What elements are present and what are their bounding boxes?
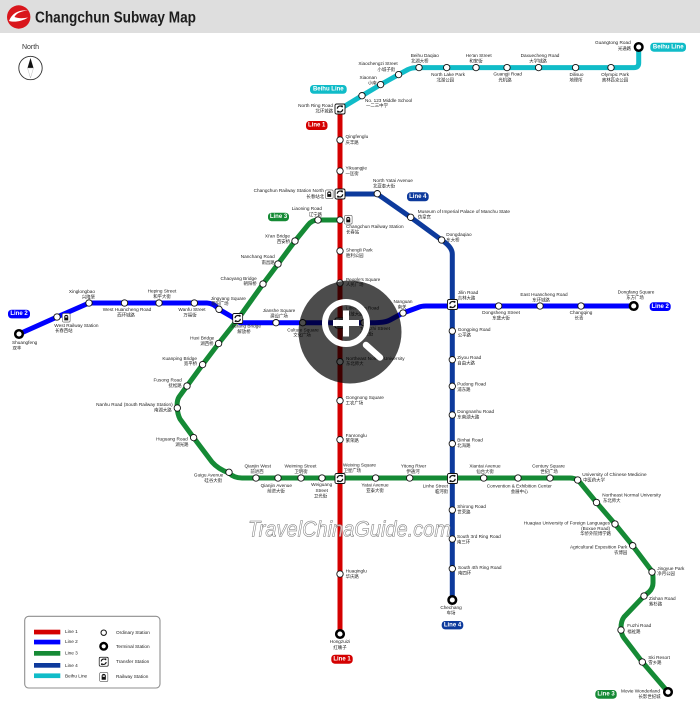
station: Northeast Normal University (line 3) — [593, 492, 662, 506]
station: Chaoyang Bridge: 朝阳桥 — [244, 280, 257, 287]
station: Ski Resort: Ski Resort — [648, 655, 671, 660]
station: Ziyou Road — [449, 355, 482, 366]
station: Dongsheng Street: Dongsheng Street — [482, 310, 521, 315]
station: Shuangfeng: Shuangfeng — [12, 340, 38, 345]
station: South 3rd Ring Road — [449, 534, 501, 546]
line 4 route — [340, 194, 452, 600]
station: Jiefang Bridge — [231, 314, 261, 335]
stations of beihu line — [358, 40, 642, 109]
station: Gongnong Square: Gongnong Square — [346, 395, 384, 400]
station: Guigu Avenue: 硅谷大街 — [204, 477, 223, 484]
station: Xinglongbao: Xinglongbao — [69, 289, 95, 294]
station: Shirong Road: Shirong Road — [457, 504, 486, 509]
station: Yitong River: Yitong River — [401, 464, 427, 468]
station: Dongsheng Street — [482, 303, 521, 322]
station: Movie Wonderland — [621, 688, 672, 700]
station: Weixing Square: 卫星广场 — [344, 467, 362, 474]
station: Xi'an Bridge — [265, 234, 298, 245]
station: Changchun Railway Station North — [254, 188, 345, 200]
station: Chechang: Chechang — [440, 605, 462, 610]
station: Gongping Road: Gongping Road — [458, 327, 491, 332]
tag: Line 1 bottom: Line 1 — [333, 656, 351, 662]
station: Daxuecheng Road: Daxuecheng Road — [521, 53, 560, 58]
station: Liaoning Road — [292, 206, 323, 223]
station: North Lake Park: North Lake Park — [431, 72, 466, 77]
station: Huaqiao University of Foreign Languages — [524, 520, 618, 537]
station: Pudong Road — [449, 382, 486, 393]
station: Huguang Road: 湖光路 — [175, 441, 189, 448]
station: No. 123 Middle School: 一二三中学 — [366, 102, 389, 109]
station: Nanhu Road: 南湖大路 — [154, 406, 172, 414]
station: Qingfenglu — [337, 134, 369, 146]
station: Qianjin Avenue: 前进大街 — [267, 488, 285, 494]
legend: Line 3 — [65, 651, 78, 656]
station: Weiguang Street: Street — [315, 488, 329, 493]
station: Chechang — [440, 596, 462, 616]
station: Agricultural Exposition Park — [570, 542, 636, 556]
station: Liberation Road: 解放大路 — [346, 310, 364, 318]
station: Jingyang Square: Jingyang Square — [211, 296, 246, 301]
station: Weiguang Street — [311, 475, 333, 500]
tag: Line 2 right: Line 2 — [652, 304, 670, 310]
legend: Line 4 — [65, 663, 78, 668]
station: East Huancheng Road — [520, 292, 568, 309]
tag: Line 1 top: Line 1 — [308, 123, 326, 129]
station: Dilisuo — [569, 64, 584, 84]
station: Shirong Road: 世荣路 — [457, 508, 471, 516]
station: Qianjin West — [244, 464, 272, 481]
station: Shengli Park — [337, 248, 373, 259]
station: South 3rd Ring Road: 南三环 — [457, 538, 471, 546]
station: Huxi Bridge: 湖西桥 — [200, 340, 214, 347]
tag: Line 3 top — [268, 213, 289, 221]
station: Hongzuizi: 红嘴子 — [333, 644, 347, 651]
station: Guangji Road: Guangji Road — [493, 72, 522, 76]
station: Tongzhi Street: 同志街 — [360, 330, 374, 338]
station: Kuanping Bridge — [162, 356, 206, 368]
station: Gongping Road: 公平路 — [458, 332, 471, 338]
station: Nanchang Road — [241, 254, 281, 267]
station: North Lake Park — [431, 64, 466, 84]
station: Xi'an Bridge: 西安桥 — [277, 238, 291, 245]
station: Weixing Square: Weixing Square — [343, 462, 376, 468]
station: Dongfang Square — [618, 290, 655, 310]
legend: Transfer Station — [116, 659, 150, 664]
tag: Line 2 left: Line 2 — [10, 311, 28, 317]
station: Huaqiao University of Foreign Languages: Huaqiao University of Foreign Languages — [524, 520, 611, 526]
station: Chaoyang Bridge: Chaoyang Bridge — [220, 276, 257, 281]
station: Culture Square: Culture Square — [287, 328, 319, 332]
tag: Line 4 bottom — [442, 621, 463, 629]
station: Fusong Road: Fusong Road — [154, 378, 182, 382]
station: Gongnong Square: 工农广场 — [346, 400, 364, 406]
station: West Railway Station — [54, 313, 99, 334]
station: Jiefang Bridge: Jiefang Bridge — [231, 324, 261, 328]
station: Binhai Road: 北海路 — [457, 442, 471, 449]
station: Jingyang Square: 景阳广场 — [211, 300, 229, 307]
station: Northeast Normal University (line 3): 东北师大 — [603, 497, 621, 504]
station: Shengli Park: Shengli Park — [346, 248, 373, 252]
station: Huaqiao University of Foreign Languages: 华侨外院博学路 — [580, 530, 612, 537]
station: Ski Resort — [639, 655, 671, 666]
station: Fanronglu: Fanronglu — [346, 433, 367, 438]
station: Huxi Bridge: Huxi Bridge — [190, 336, 215, 340]
station: Yikuangjie: 一匡街 — [346, 170, 359, 177]
station: Changchun Railway Station — [337, 215, 404, 236]
station: Northeast Normal University (line 3): Northeast Normal University — [602, 492, 662, 498]
station: Nanhu Road: Nanhu Road (South Railway Station) — [96, 402, 173, 407]
station: Yitong River: 伊通河 — [406, 468, 420, 475]
station: Guigu Avenue: Guigu Avenue — [194, 472, 224, 478]
station: Xiantai Avenue: Xiantai Avenue — [469, 464, 501, 468]
station: Huaqinglu — [337, 568, 367, 580]
tag: Line 2 right — [650, 302, 671, 311]
station: Beihu Daqiao — [411, 53, 439, 71]
station: Xiaochengzi Street — [358, 61, 402, 78]
station: Dongnanhu Road: 东南湖大路 — [457, 414, 480, 420]
station: Xiaonan: 小南 — [368, 80, 377, 86]
station: Xiaochengzi Street: Xiaochengzi Street — [358, 61, 398, 66]
station: Dongnanhu Road: Dongnanhu Road — [457, 409, 494, 414]
station: Dongdaqiao — [438, 232, 472, 244]
tag: Line 1 bottom — [331, 655, 353, 664]
tag: Line 4 top — [407, 192, 429, 201]
station: Fanronglu — [337, 433, 367, 444]
station: Xi'an Bridge: Xi'an Bridge — [265, 234, 290, 238]
watermark: TravelChinaGuide.com — [248, 516, 451, 542]
compass: north — [19, 44, 42, 80]
station: No. 123 Middle School: No. 123 Middle School — [365, 98, 412, 103]
station: Movie Wonderland: 长影世纪城 — [639, 693, 661, 700]
station: Beihu Daqiao: Beihu Daqiao — [411, 53, 439, 58]
station: Museum of Imperial Palace of Manchu State: Museum of Imperial Palace of Manchu State — [418, 209, 510, 214]
station: Jingyang Square — [211, 296, 246, 312]
station: Kuanping Bridge: Kuanping Bridge — [162, 356, 197, 361]
tag: Line 3 bottom — [595, 690, 617, 699]
icon: airline style red logo — [7, 5, 30, 29]
station: Agricultural Exposition Park: 农博园 — [614, 549, 628, 556]
legend: Line 1 — [65, 629, 78, 634]
tag: Beihu Line right: Beihu Line — [653, 44, 684, 50]
station: Heping Street: 和平大街 — [153, 293, 171, 300]
station: Culture Square — [287, 320, 319, 338]
station: No. 123 Middle School — [359, 92, 412, 109]
station: Ski Resort: 雪乡路 — [648, 659, 662, 666]
station: Northeast Normal University — [337, 356, 405, 367]
station: Daxuecheng Road — [521, 53, 560, 71]
tag: Line 4 bottom: Line 4 — [444, 622, 462, 628]
station: Guangtong Road: Guangtong Road — [595, 40, 631, 45]
station: Century Square — [532, 464, 565, 481]
station: Changqing: 长青 — [575, 314, 584, 322]
station: Dongdaqiao: Dongdaqiao — [446, 232, 472, 237]
station: Kuanping Bridge: 宽平桥 — [184, 360, 198, 367]
station: Ziyou Road: Ziyou Road — [457, 355, 482, 360]
station: Yikuangjie — [337, 166, 367, 177]
station: He'an Street: 和安街 — [469, 58, 483, 64]
station: Xiaonan — [359, 75, 384, 88]
station: He'an Street — [466, 53, 492, 71]
station: Guigu Avenue — [194, 469, 232, 484]
station: Chaoyang Bridge — [220, 276, 266, 287]
station: Huaqinglu: Huaqinglu — [346, 568, 367, 574]
station: Jilin Road: Jilin Road — [458, 290, 479, 295]
station: Jianshe Square: Jianshe Square — [263, 308, 296, 313]
station: South 4th Ring Road: 南四环 — [458, 570, 472, 576]
station: Heping Street: Heping Street — [148, 288, 177, 294]
icon: magnifier zoom overlay — [298, 280, 402, 384]
station: Qianjin West: 前进西 — [250, 468, 264, 475]
line 2 route — [19, 303, 634, 334]
tag: Line 1 top — [306, 121, 328, 130]
tag: Line 2 left — [8, 310, 30, 318]
station: Jingyue Park: Jingyue Park — [657, 566, 685, 571]
tag: Line 4 top: Line 4 — [409, 194, 427, 200]
station: Shengli Park: 胜利公园 — [346, 252, 364, 259]
stations of line 4 — [373, 178, 510, 616]
station: Tongzhi Street: Tongzhi Street — [360, 326, 391, 331]
station: Binhai Road — [449, 438, 483, 449]
station: Liaoning Road: 辽宁路 — [309, 211, 323, 218]
station: Yatai Avenue — [361, 475, 389, 494]
station: People's Square — [337, 277, 381, 288]
station: Movie Wonderland: Movie Wonderland — [621, 688, 660, 694]
station: Nanhu Road — [96, 402, 180, 414]
station: North Ring Road: North Ring Road — [298, 103, 333, 108]
station: Shuangfeng: 双丰 — [12, 344, 22, 352]
station: Pudong Road: Pudong Road — [457, 382, 486, 386]
station: Linhe Street: 临河街 — [435, 488, 449, 495]
station: North Yatai Avenue — [373, 178, 413, 197]
station: West Huancheng Road: West Huancheng Road — [103, 307, 152, 312]
tag: Line 3 bottom: Line 3 — [597, 692, 615, 698]
tag: Beihu Line left — [310, 85, 347, 94]
station: He'an Street: He'an Street — [466, 53, 492, 58]
compass: north: North — [22, 44, 39, 51]
header bar — [0, 0, 700, 33]
station: Fuzhi Road: 福祉路 — [627, 628, 641, 635]
station: West Huancheng Road — [103, 300, 152, 318]
station: Dongfang Square: Dongfang Square — [618, 290, 655, 294]
legend: Beihu Line — [65, 673, 88, 678]
station: Liberation Road: Liberation Road — [346, 306, 379, 310]
station: Guangji Road: 光机路 — [498, 76, 512, 84]
station: Changchun Railway Station North: 长春站北 — [306, 193, 325, 200]
legend: Ordinary Station — [116, 630, 150, 635]
station: Changchun Railway Station: 长春站 — [346, 228, 360, 236]
station: Northeast Normal University: Northeast Normal University — [346, 356, 405, 361]
line 3 route — [177, 220, 668, 692]
station: Dilisuo: 地理所 — [569, 76, 583, 84]
station: Tongzhi Street — [360, 320, 391, 338]
station: North Ring Road: 北环城路 — [315, 108, 334, 114]
station: Xinglongbao: 兴隆堡 — [82, 294, 96, 300]
station: Changchun Railway Station: Changchun Railway Station — [346, 224, 404, 229]
station: People's Square: 人民广场 — [346, 281, 364, 288]
tag: Beihu Line left: Beihu Line — [313, 86, 344, 92]
station: University of Chinese Medicine: 中医药大学 — [583, 476, 606, 484]
station: West Huancheng Road: 西环城路 — [117, 312, 135, 318]
station: Guangtong Road — [595, 40, 642, 52]
station: Heping Street — [148, 288, 177, 306]
station: West Railway Station: 长春西站 — [55, 327, 73, 334]
station: University of Chinese Medicine — [574, 472, 647, 484]
station: Pudong Road: 浦东路 — [457, 386, 471, 393]
legend — [25, 616, 160, 688]
station: Guangtong Road: 光通路 — [618, 45, 632, 52]
station: Ziyou Road: 自由大路 — [457, 360, 475, 366]
station: Changqing — [570, 303, 593, 322]
station: South 4th Ring Road: South 4th Ring Road — [458, 565, 502, 570]
station: Dongdaqiao: 东大桥 — [446, 236, 460, 244]
station: Xiaochengzi Street: 小城子街 — [377, 66, 396, 73]
station: Northeast Normal University: 东北师大 — [346, 360, 364, 367]
station: Yatai Avenue: Yatai Avenue — [361, 482, 389, 488]
station: Hongzuizi: Hongzuizi — [330, 639, 350, 644]
station: Olympic Park — [601, 64, 630, 84]
station: Qingfenglu: Qingfenglu — [346, 134, 369, 139]
tag: Beihu Line right — [650, 43, 686, 52]
station: Xiantai Avenue: 仙台大街 — [476, 468, 494, 475]
station: Nanguan — [393, 299, 413, 316]
station: Yatai Avenue: 亚泰大街 — [366, 487, 384, 494]
station: Nanguan: Nanguan — [393, 299, 413, 304]
station: Beihu Daqiao: 北湖大桥 — [411, 58, 429, 64]
station: East Huancheng Road: East Huancheng Road — [520, 292, 568, 297]
beihu line route — [340, 47, 639, 109]
station: Gongnong Square — [337, 395, 384, 406]
station: Nanguan: 南关 — [398, 304, 407, 310]
station: Zishan Road: Zishan Road — [649, 596, 676, 601]
station: Huaqiao University of Foreign Languages: (Boxue Road) — [581, 526, 610, 531]
station: North Lake Park: 北湖公园 — [437, 76, 455, 84]
station: Museum of Imperial Palace of Manchu State — [408, 209, 510, 220]
station: Xiantai Avenue — [469, 464, 501, 481]
legend: Terminal Station — [116, 644, 150, 649]
legend: Railway Station — [116, 674, 149, 679]
station: Jilin Road — [448, 290, 479, 310]
station: Hongzuizi — [330, 630, 350, 651]
station: Qingfenglu: 庆丰路 — [346, 139, 359, 146]
station: Changqing: Changqing — [570, 310, 593, 315]
station: Jianshe Square — [263, 308, 296, 326]
station: Linhe Street: Linhe Street — [423, 484, 449, 488]
station: Weiming Street: Weiming Street — [285, 464, 317, 468]
station: Convention & Exhibition Center — [487, 475, 552, 495]
station: Olympic Park: Olympic Park — [601, 72, 630, 77]
station: Jilin Road: 吉林大路 — [458, 294, 476, 302]
station: Fanronglu: 繁荣路 — [346, 437, 359, 444]
station: Jianshe Square: 建设广场 — [270, 312, 288, 320]
station: Qianjin West: Qianjin West — [244, 464, 272, 468]
station: Museum of Imperial Palace of Manchu State: 伪皇宫 — [418, 214, 431, 220]
station: Olympic Park: 奥林匹克公园 — [602, 76, 629, 84]
station: Liberation Road — [335, 306, 379, 328]
station: Shuangfeng — [12, 330, 38, 352]
station: Wanfu Street: Wanfu Street — [178, 307, 206, 312]
station: Jingyue Park: 净月公园 — [657, 570, 675, 577]
station: Fuzhi Road: Fuzhi Road — [627, 623, 652, 628]
station: Dilisuo: Dilisuo — [569, 72, 584, 77]
station: East Huancheng Road: 东环城路 — [532, 296, 550, 304]
station: People's Square: People's Square — [346, 277, 381, 282]
station: Xiaonan: Xiaonan — [359, 75, 377, 80]
station: Culture Square: 文化广场 — [293, 332, 311, 338]
station: Yitong River — [401, 464, 427, 481]
station: South 3rd Ring Road: South 3rd Ring Road — [457, 534, 501, 539]
tag: Line 3 top: Line 3 — [270, 214, 288, 220]
station: Huaqinglu: 华庆路 — [346, 573, 359, 580]
legend: Line 2 — [65, 639, 78, 644]
station: Wanfu Street — [178, 300, 206, 318]
station: Century Square: 世纪广场 — [540, 468, 558, 475]
station: Nanchang Road: 南昌路 — [262, 259, 275, 266]
station: Jingyue Park — [649, 566, 685, 577]
station: North Ring Road — [298, 103, 345, 114]
station: Dongsheng Street: 东盛大街 — [492, 314, 510, 322]
title: Changchun Subway Map — [35, 10, 196, 26]
stations of line 3 — [96, 206, 685, 700]
station: Xinglongbao — [69, 289, 96, 306]
station: Qianjin Avenue: Qianjin Avenue — [261, 483, 292, 488]
station: Fusong Road: 抚松路 — [169, 382, 182, 389]
station: West Railway Station: West Railway Station — [54, 323, 99, 328]
station: Wanfu Street: 万福街 — [183, 312, 197, 318]
station: Huguang Road: Huguang Road — [156, 436, 188, 442]
station: Binhai Road: Binhai Road — [457, 438, 483, 442]
station: Gongping Road — [449, 327, 491, 338]
station: Jiefang Bridge: 解放桥 — [237, 328, 251, 335]
station: Fusong Road — [154, 378, 190, 389]
station: Convention & Exhibition Center: 会展中心 — [511, 488, 529, 495]
station: Chechang: 车场 — [447, 610, 456, 616]
station: Nanchang Road: Nanchang Road — [241, 254, 275, 259]
station: Daxuecheng Road: 大学城路 — [529, 58, 547, 64]
station: Dongfang Square: 东方广场 — [626, 294, 644, 301]
station: Liaoning Road: Liaoning Road — [292, 206, 322, 211]
station: Guangji Road — [493, 64, 522, 84]
station: Huxi Bridge — [190, 336, 222, 347]
station: Qianjin Avenue — [261, 475, 292, 494]
station: University of Chinese Medicine: University of Chinese Medicine — [582, 472, 647, 477]
station: Century Square: Century Square — [532, 464, 565, 468]
station: Agricultural Exposition Park: Agricultural Exposition Park — [570, 544, 628, 550]
station: Weiming Street — [285, 464, 317, 481]
station: North Yatai Avenue: North Yatai Avenue — [373, 178, 413, 183]
station: Yikuangjie: Yikuangjie — [346, 166, 367, 170]
station: North Yatai Avenue: 北亚泰大街 — [373, 182, 396, 190]
station: Zishan Road — [641, 593, 676, 608]
station: Weiming Street: 卫明街 — [294, 468, 308, 475]
station: Changchun Railway Station North: Changchun Railway Station North — [254, 188, 324, 193]
stations of line 2 — [12, 288, 655, 352]
station: Linhe Street — [423, 474, 458, 495]
station: Zishan Road: 紫杉路 — [649, 600, 663, 608]
station: Weixing Square — [335, 462, 376, 484]
station: Shirong Road — [449, 504, 486, 516]
line 1 route — [338, 109, 342, 634]
station: South 4th Ring Road — [449, 565, 502, 576]
station: Fuzhi Road — [618, 623, 652, 635]
stations of line 1 — [254, 103, 405, 651]
station: Huguang Road — [156, 434, 197, 448]
station: Convention & Exhibition Center: Convention & Exhibition Center — [487, 484, 552, 488]
station: Dongnanhu Road — [449, 409, 494, 420]
station: Weiguang Street: Weiguang — [311, 482, 333, 487]
station: Weiguang Street: 卫光街 — [314, 492, 328, 500]
